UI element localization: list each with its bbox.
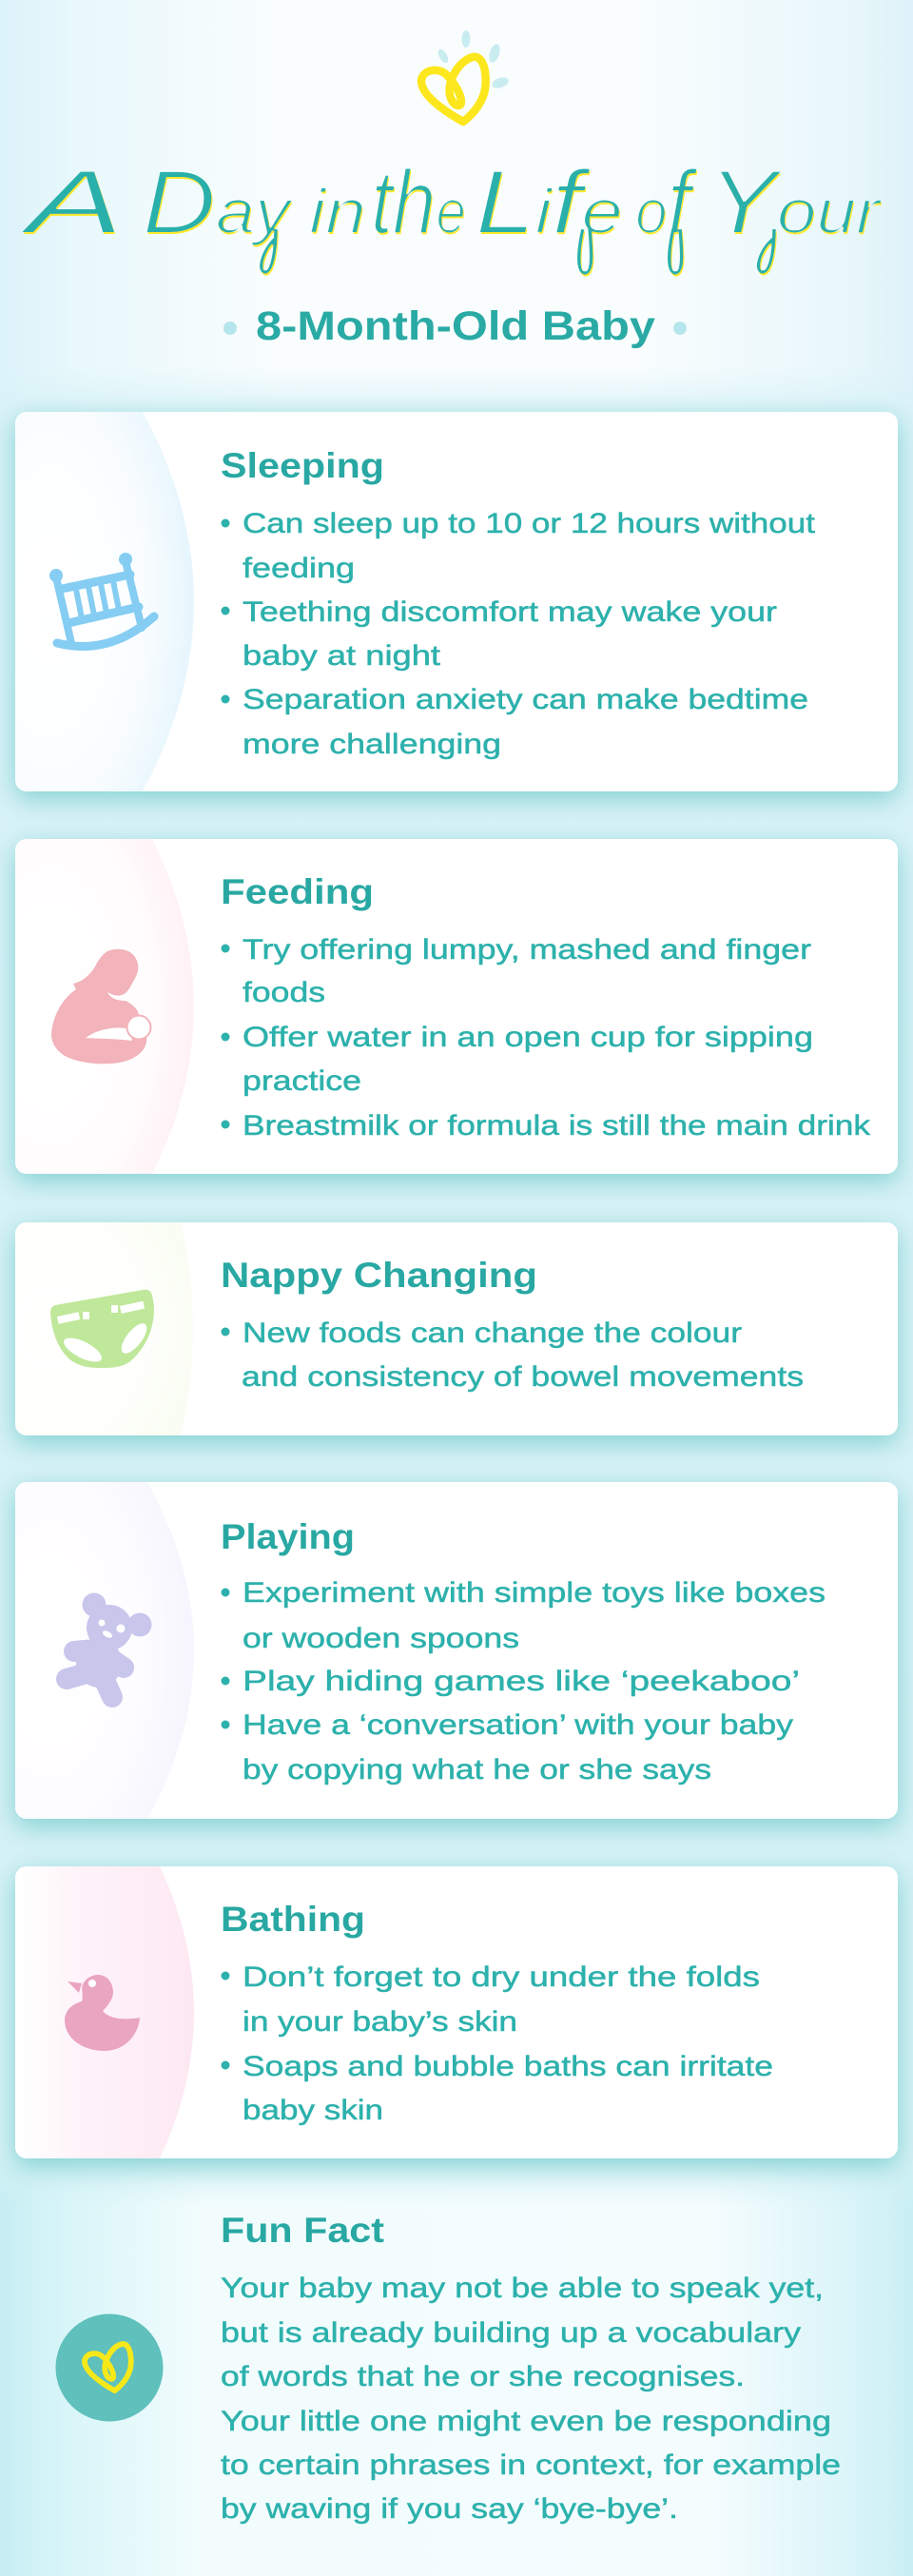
bullet list: foods	[243, 977, 325, 1008]
title: the	[371, 152, 466, 253]
icon: rubber duck	[65, 1975, 140, 2051]
bullet list: Breastmilk or formula is still the main drink	[243, 1110, 871, 1142]
bullet list	[221, 1317, 804, 1393]
title: Life	[476, 152, 623, 253]
bullet list: feeding	[243, 553, 355, 584]
icon: mother feeding baby	[51, 949, 150, 1064]
bullet list: Play hiding games like ‘peekaboo’	[243, 1666, 800, 1697]
subtitle with dots: 8-Month-Old Baby	[256, 303, 655, 349]
panel: nappy changing	[15, 1222, 898, 1435]
icon: rocking crib	[49, 553, 154, 647]
title: in	[309, 176, 366, 246]
title: Your	[709, 152, 883, 253]
bullet list: Soaps and bubble baths can irritate	[243, 2051, 773, 2082]
heading: Playing	[221, 1517, 355, 1556]
bullet list	[221, 934, 871, 1142]
panel: sleeping	[15, 412, 898, 791]
text block: but is already building up a vocabulary	[221, 2317, 801, 2349]
title	[19, 152, 883, 273]
heading: Fun Fact	[221, 2211, 384, 2250]
bullet list: practice	[243, 1065, 361, 1097]
bullet list	[221, 1961, 773, 2126]
title: Day	[143, 152, 294, 253]
panel: feeding	[15, 839, 898, 1174]
bullet list: Separation anxiety can make bedtime	[243, 684, 808, 715]
text block: to certain phrases in context, for example	[221, 2449, 841, 2481]
bullet list: and consistency of bowel movements	[242, 1361, 804, 1393]
bullet list: Can sleep up to 10 or 12 hours without	[243, 508, 816, 539]
bullet list: Experiment with simple toys like boxes	[243, 1577, 826, 1609]
bullet list	[221, 1577, 826, 1786]
panel: playing	[15, 1482, 898, 1819]
icon: teddy bear	[67, 1592, 152, 1697]
bullet list: or wooden spoons	[243, 1623, 519, 1654]
title: A	[19, 152, 124, 253]
heading: Nappy Changing	[221, 1256, 537, 1295]
bullet list: by copying what he or she says	[243, 1754, 711, 1786]
bullet list: Teething discomfort may wake your	[243, 596, 777, 628]
bullet list: Have a ‘conversation’ with your baby	[243, 1709, 793, 1741]
bullet list: Don’t forget to dry under the folds	[243, 1961, 760, 1993]
panel: bathing	[15, 1866, 898, 2158]
bullet list: more challenging	[243, 729, 501, 760]
text block	[221, 2273, 841, 2525]
bullet list: New foods can change the colour	[243, 1317, 742, 1349]
bullet list: Try offering lumpy, mashed and finger	[243, 934, 811, 966]
bullet list: Offer water in an open cup for sipping	[243, 1022, 813, 1053]
heading: Bathing	[221, 1900, 365, 1939]
title: of	[635, 152, 698, 253]
bullet list: in your baby’s skin	[243, 2006, 517, 2038]
panel: fun fact	[55, 2211, 841, 2525]
icon: nappy	[50, 1290, 154, 1368]
icon: heart badge	[55, 2313, 164, 2422]
text block: Your baby may not be able to speak yet,	[221, 2273, 824, 2304]
logo: yellow heart with rays	[421, 30, 510, 122]
text block: by waving if you say ‘bye-bye’.	[221, 2493, 678, 2525]
text block: Your little one might even be responding	[221, 2406, 831, 2437]
bullet list	[221, 508, 816, 760]
bullet list: baby skin	[243, 2095, 383, 2126]
text block: of words that he or she recognises.	[221, 2361, 745, 2392]
heading: Sleeping	[221, 446, 384, 485]
heading: Feeding	[221, 872, 374, 911]
bullet list: baby at night	[243, 640, 441, 672]
